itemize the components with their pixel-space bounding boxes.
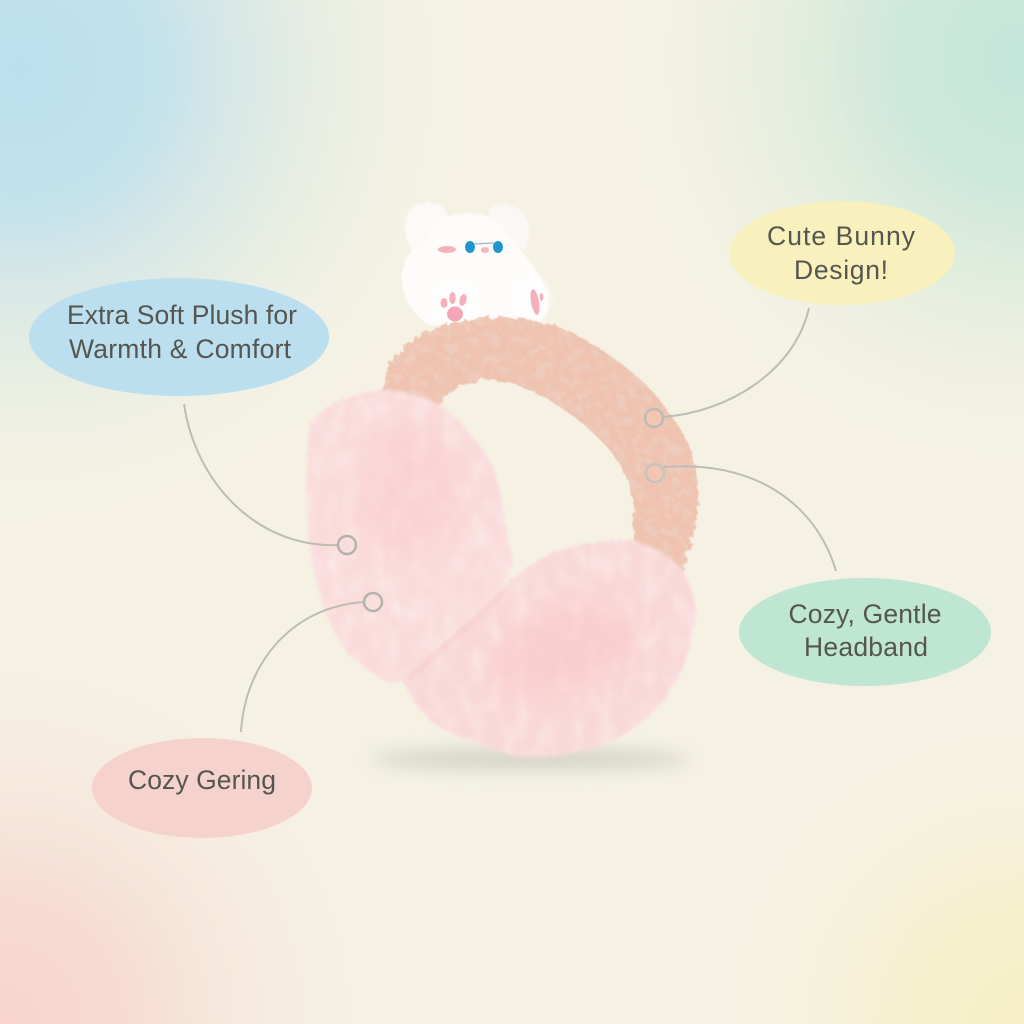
leader line [663, 308, 809, 417]
label: Warmth & Comfort [69, 334, 292, 364]
earmuff ground shadow [370, 749, 690, 769]
leader line [664, 466, 836, 571]
callout: extra soft plush [29, 278, 356, 554]
bunny right paw [511, 276, 549, 320]
bunny charm [402, 202, 549, 325]
label: Cozy Gering [128, 765, 276, 795]
label: Extra Soft Plush for [67, 300, 297, 330]
label [767, 221, 916, 285]
callout: cozy gentle headband [646, 464, 991, 686]
bubble [739, 578, 991, 686]
marker [338, 536, 356, 554]
marker [646, 464, 664, 482]
marker [364, 593, 382, 611]
bubble [92, 738, 312, 838]
right ear cup [403, 540, 696, 757]
headband [382, 318, 698, 572]
bunny body [402, 213, 548, 325]
leader line [184, 404, 338, 545]
cup seam [410, 590, 505, 678]
cup join filler [400, 588, 530, 710]
label [788, 599, 942, 662]
callout: cozy gering [92, 593, 382, 838]
left cup shading [355, 420, 465, 560]
leader line [241, 602, 364, 732]
label: Cute Bunny [767, 221, 916, 251]
label: Cozy, Gentle [788, 599, 942, 629]
callout: cute bunny design [645, 201, 955, 427]
left ear cup [306, 390, 513, 684]
illustration: plush bunny earmuffs [306, 202, 698, 757]
bubble [29, 278, 329, 396]
label: Design! [794, 255, 888, 285]
bunny face [438, 241, 503, 253]
marker [645, 409, 663, 427]
bubble [729, 201, 955, 305]
label: Headband [804, 632, 928, 662]
bunny left paw [431, 281, 479, 325]
bunny ears [405, 202, 529, 258]
label [67, 300, 297, 364]
right cup shading [480, 583, 650, 717]
